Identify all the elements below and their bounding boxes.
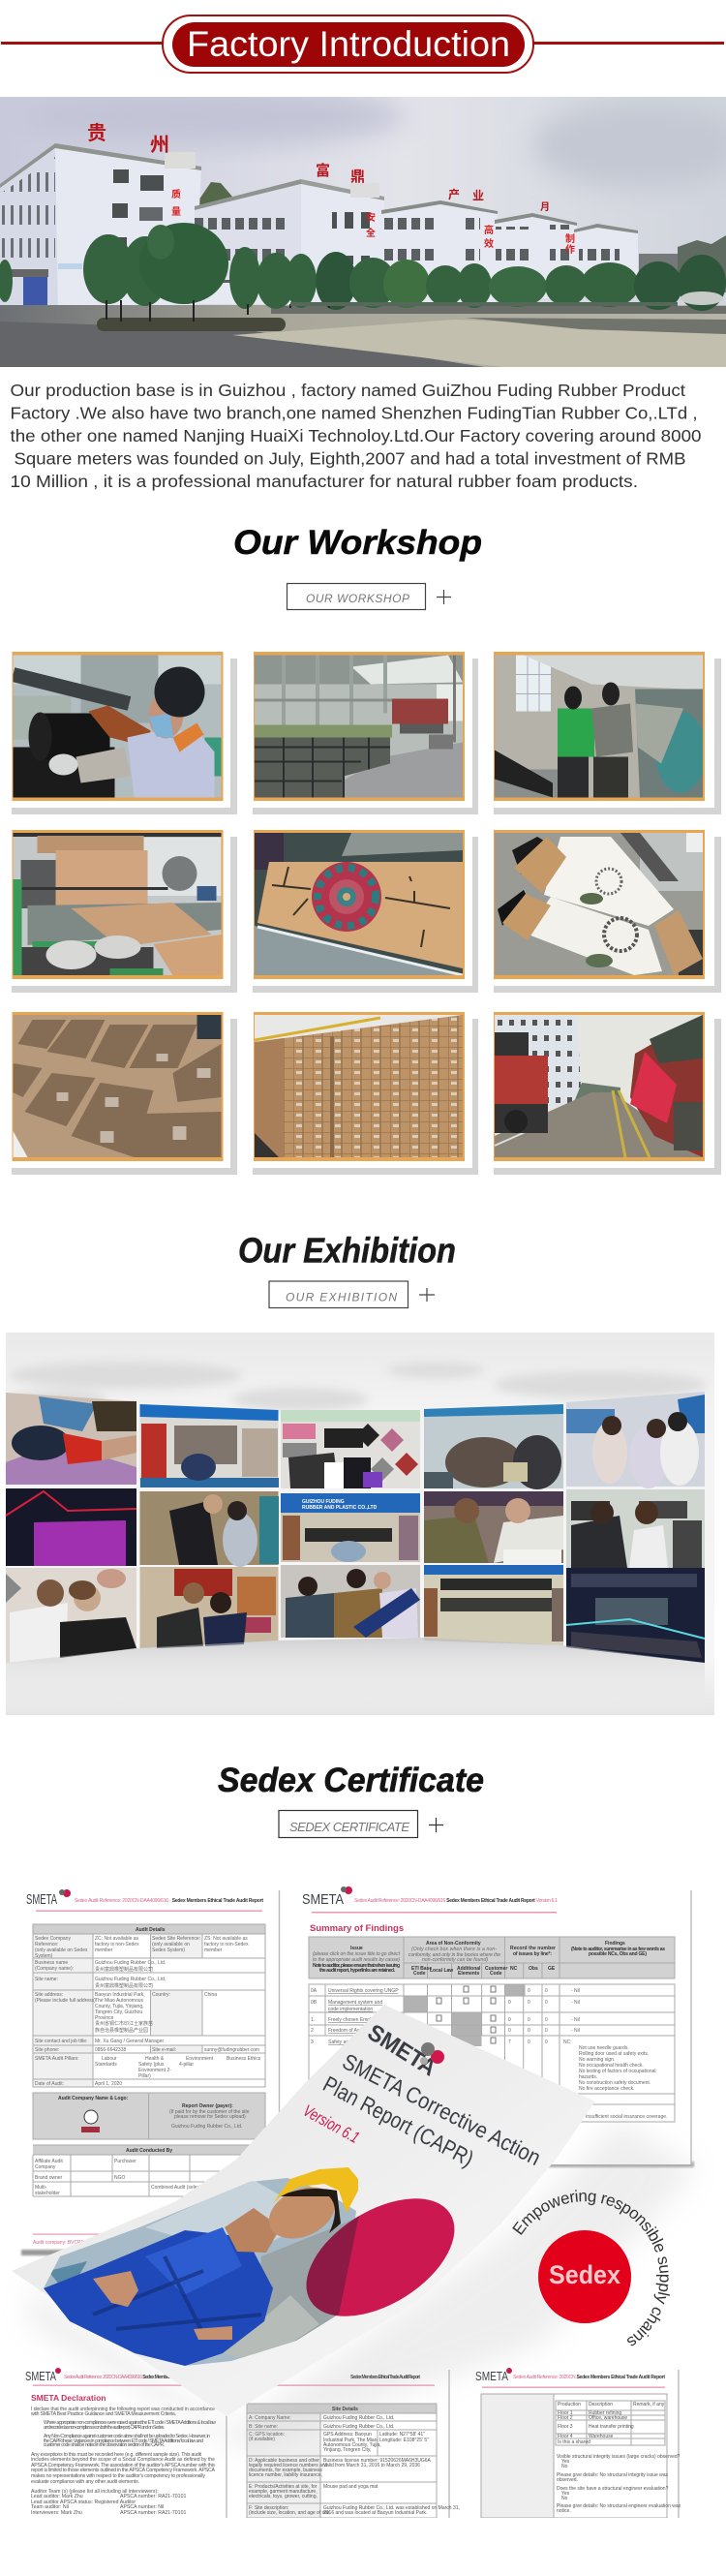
document: SMETA declaration: SMETA (25, 2369, 56, 2383)
photo: rolled printed cork mats (495, 833, 703, 975)
document: audit details: Province (95, 2015, 114, 2021)
document: audit details: ZS: Not available as (204, 1936, 248, 1942)
document: audit details: 4-pillar (179, 2062, 194, 2068)
document: site details: electricals, toys, grower, cutting, (249, 2494, 318, 2499)
document: summary of findings: Universal Rights covering UNGP (328, 1988, 399, 1994)
document: audit details: NGO (114, 2175, 126, 2181)
document: summary of findings: 0 (528, 2039, 530, 2045)
document: audit details: Audit company: BVCPS (33, 2240, 84, 2246)
document: site details: 2016 and was located at Baoyun Industrial Park. (323, 2510, 427, 2516)
document: site details: Guizhou Fuding Rubber Co., Ltd. was established on March 31, (323, 2505, 460, 2511)
worker photograph (39, 2174, 363, 2373)
document: audit details: Multi- (35, 2185, 47, 2191)
document: audit details: Report Owner (payer): (182, 2103, 233, 2109)
document: SMETA declaration: Auditor Team (s) (please list all including all interviewers): (31, 2489, 159, 2495)
photo: open cartons of product (14, 1015, 221, 1157)
tag: sedex certificate (279, 1811, 418, 1838)
sheet title: SMETA Corrective Action (339, 2048, 545, 2170)
document: summary of findings: - Nil (571, 2017, 580, 2023)
soft shadow under CAPR sheet (29, 2121, 697, 2450)
document: summary of findings: NC (510, 1966, 518, 1972)
document: audit details: ZC: Not available as (95, 1936, 139, 1942)
document: summary of findings: No warning sign. (579, 2057, 615, 2063)
booth photo row 1 (6, 1392, 705, 1489)
document: site details: A: Company Name: (249, 2415, 291, 2421)
document: audit details: Site address: (35, 1992, 63, 1998)
red rooftop signs: 产 (448, 187, 460, 201)
document: site details: Valid from March 31, 2016 to March 29, 2036 (323, 2463, 420, 2469)
document: audit details: Pillar) (138, 2073, 151, 2079)
document: audit details: member (204, 1947, 223, 1953)
document: audit details: sunny@fudingrubber.com (204, 2047, 259, 2053)
building 5 (577, 228, 638, 275)
document: audit details: Guizhou Fuding Rubber Co., Ltd. (95, 1960, 166, 1966)
document: site details: legally required licence numbers and (249, 2463, 328, 2469)
document: audit details: April 1, 2020 (95, 2081, 122, 2087)
intro paragraph: Factory .We also have two branch,one named Shenzhen FudingTian Rubber Co,.LTd , (10, 403, 697, 422)
photo: cork yoga mat with mandala (255, 833, 463, 975)
document: SMETA declaration: SMETA Declaration (31, 2393, 106, 2403)
document: summary of findings: GE (548, 1966, 556, 1972)
document: summary of findings: conformity, and only in the box/es where the (408, 1952, 500, 1958)
document: audit details: Sedex Company (35, 1936, 71, 1942)
document: site details: example, garment manufacture, (249, 2489, 318, 2495)
document: summary of findings: 2 (311, 2028, 314, 2034)
document: audit details: member (95, 1947, 113, 1953)
document: summary of findings: Freely chosen Employment (328, 2017, 387, 2023)
document: audit details: Mr. Xu Gang / General Manager (95, 2039, 164, 2044)
document: building details: Floor 2 (558, 2415, 573, 2421)
document: audit details: Environment (186, 2056, 214, 2062)
document: summary of findings: - Nil (571, 2000, 580, 2006)
document: audit details: Environment 2- (138, 2068, 171, 2073)
document: audit details: (Company name): (35, 1966, 74, 1972)
document: audit details: Sedex Audit Reference: 2020CN-DAA4096/616 - Sedex Members Ethical Trade Audit Report (75, 1898, 263, 1904)
factory photograph: 量 (171, 206, 181, 218)
heading: Our Workshop: Our Workshop (233, 524, 482, 562)
intro paragraph: 10 Million , it is a professional manufacturer for natural rubber foam products. (10, 472, 638, 491)
document: site details: Industrial Park, The Miao (323, 2438, 378, 2443)
document: summary of findings: Note to auditor, please ensure that when issuing (313, 1963, 400, 1969)
document: audit details: Business name (35, 1960, 68, 1966)
document: audit details: Site e-mail: (152, 2047, 176, 2053)
document: audit details: 贵州省铜仁市印江土家族苗 (95, 2020, 153, 2027)
document: summary of findings: 0 (545, 2017, 548, 2023)
document: audit details: Guizhou Fuding Rubber Co., Ltd. (95, 1977, 166, 1982)
document: audit details: Sedex System) (152, 1947, 185, 1953)
sheet title: Plan Report (CAPR) (319, 2070, 478, 2171)
document: audit details: Audit Details (136, 1927, 166, 1933)
worker head and helmet (260, 2167, 358, 2249)
document: SMETA declaration: report is limited to those elements outlined in the APSCA Competency Framework. APSCA (31, 2468, 216, 2473)
document: audit details: 族自治县橡塑制品产业园 (95, 2027, 148, 2034)
document: building details: Warehouse (589, 2434, 614, 2439)
document: summary of findings: 0B (311, 2000, 318, 2006)
exhibition photo wall panel (6, 1333, 714, 1715)
tag: our workshop (287, 583, 426, 610)
document: summary of findings: 0 (528, 1988, 530, 1994)
building 3 (381, 200, 498, 302)
document: summary of findings: hazards. (579, 2074, 597, 2080)
document: summary of findings: non-conformity can be found) (422, 1957, 488, 1963)
document: summary of findings: Not use needle guards. (579, 2045, 629, 2051)
document: site details: Latitude: N27°58' 41" (379, 2432, 425, 2438)
document: summary of findings: (Only check box when there is a non- (411, 1947, 497, 1952)
document: building details: Remark, if any (633, 2402, 665, 2407)
photo: cork sheet on rollers (14, 833, 221, 975)
document: SMETA declaration: Lead auditor APSCA status: Registered Auditor (31, 2499, 136, 2505)
document: audit details: Tongren City, Guizhou (95, 2009, 142, 2015)
document: summary of findings: No construction safety document. (579, 2080, 650, 2086)
document: summary of findings: Obs (529, 1966, 538, 1972)
document: audit details: Standards (95, 2062, 117, 2068)
document: summary of findings: 1. (311, 2017, 315, 2023)
document: SMETA declaration: Any exceptions to this must be recorded here (e.g. different sample size). This audit (31, 2452, 202, 2458)
document: site details: Guizhou Fuding Rubber Co., Ltd. (323, 2415, 394, 2421)
world map texture (10, 1362, 707, 1411)
building 2 (195, 179, 384, 304)
heading: Sedex Certificate: Sedex Certificate (218, 1762, 484, 1799)
document: SMETA declaration: includes elements beyond the scope of a Social Compliance Audit as defined by the (31, 2457, 215, 2463)
document: summary of findings: Freedom of Association (328, 2028, 378, 2034)
icon: plus (419, 1288, 435, 1302)
document: audit details: Health & (145, 2056, 165, 2062)
document: summary of findings: (Note to auditor, summarise in as few words as (571, 1947, 665, 1952)
intro paragraph: Our production base is in Guizhou , factory named GuiZhou Fuding Rubber Product (10, 381, 685, 400)
document: audit details: China (204, 1992, 217, 1998)
document: summary of findings: 0 (528, 2028, 530, 2034)
document: audit details: Business Ethics (227, 2056, 261, 2062)
document: site details: E: Products/Activities at site, for (249, 2484, 318, 2490)
document: audit details: stakeholder (35, 2191, 60, 2196)
document: SMETA declaration: with SMETA Best Practice Guidance and SMETA Measurement Criteria. (31, 2411, 176, 2417)
document: audit details: Purchaser (114, 2159, 136, 2164)
document: summary of findings: the audit report, hyperlinks are retained. (319, 1968, 396, 1974)
white cards and orange frames (5, 646, 714, 1168)
document: summary of findings: Findings (605, 1941, 625, 1947)
document: audit details: Site contact and job title: (35, 2039, 87, 2044)
document: summary of findings: Record the number (510, 1946, 556, 1951)
document: summary of findings: Code (413, 1971, 426, 1977)
document: audit details: Site phone: (35, 2047, 59, 2053)
document: summary of findings: 0 (508, 2028, 511, 2034)
heading text: Factory Introduction (187, 24, 510, 64)
document: SMETA declaration: Where appropriate non-compliances were raised against the ETI code / SMETA Additions & local law (44, 2420, 216, 2426)
document: building details: Yes (561, 2459, 570, 2465)
document: audit details: The Miao Autonomous (95, 1998, 144, 2004)
document: summary of findings: No testing of factors of occupational (579, 2069, 656, 2074)
document: site details (227, 2370, 460, 2518)
document: summary of findings: code implementation (328, 2007, 373, 2012)
document: site details: B: Site name: (249, 2424, 278, 2430)
photo: factory floor with racks and truck (255, 655, 463, 798)
document: summary of findings: to the appropriate audit results by cause) (313, 1957, 400, 1963)
document: audit details: SMETA (26, 1891, 57, 1908)
intro paragraph: Square meters was founded on July, Eighth,2007 and had a total investment of RMB (14, 449, 685, 469)
document: summary of findings: NC: (563, 2039, 572, 2045)
document: summary of findings (279, 1886, 694, 2167)
document: building details: Sedex Audit Reference: 2020CN Sedex Members Ethical Trade Audit Report (513, 2375, 665, 2380)
photo: stacked carton wall (255, 1015, 463, 1157)
document: SMETA declaration: APSCA number: RA21-70101 (120, 2494, 186, 2499)
document: summary of findings: Sedex Audit Reference: 2020CN-DAA4096/616 Sedex Members Ethical Trade Audit Report Version 6.1 (354, 1898, 558, 1904)
document: summary of findings: Area of Non-Conformity (426, 1941, 481, 1947)
document: building details: Does the site have a structural engineer evaluation? (557, 2486, 669, 2492)
document: building details: SMETA (475, 2369, 508, 2383)
tag: our exhibition (269, 1281, 408, 1307)
sheet version: Version 6.1 (300, 2101, 362, 2147)
document: summary of findings: SMETA (302, 1891, 344, 1908)
document: building details: observed. (557, 2477, 578, 2483)
document: SMETA declaration: Lead auditor: Mark Zhu (31, 2494, 83, 2499)
document: audit details: Date of Audit: (35, 2081, 64, 2087)
document: summary of findings: 0 (545, 2028, 548, 2034)
document: summary of findings: No fire acceptance check. (579, 2086, 635, 2092)
document: summary of findings: Issue (350, 1946, 363, 1951)
document: site details: Sedex Members Ethical Trade Audit Report (350, 2375, 420, 2380)
intro paragraph (10, 381, 702, 491)
document: building details: Please give details: No structural engineer evaluation was (557, 2503, 681, 2509)
document: summary of findings: 0 (528, 2000, 530, 2006)
document: SMETA declaration: and recorded as non-compliances on both the audit report, CAPR and on Sedex. (44, 2425, 165, 2431)
factory photograph: 全 (366, 227, 376, 239)
document: summary of findings: possible NCs, Obs and GE) (589, 1951, 647, 1957)
booth photo row 3 (6, 1565, 705, 1663)
document: site details: Autonomous County, Tujia, (323, 2442, 381, 2448)
document: audit details (21, 1889, 265, 2255)
document: audit details: County, Tujia, Yinjiang, (95, 2004, 143, 2009)
intro paragraph: the other one named Nanjing HuaiXi Technoloy.Ltd.Our Factory covering around 8000 (10, 426, 702, 445)
document: SMETA declaration: the CAPR these: Variances in compliance between ETI code / SMETA Additions/ local law and (44, 2438, 203, 2444)
document: SMETA declaration: Any Non-Compliance against customer code alone shall not be uploaded to Sedex. However, in (44, 2434, 210, 2439)
building 1 (38, 148, 201, 305)
document: site details: Longitude: E108°25' 5" (379, 2438, 429, 2443)
document: summary of findings: Customer (485, 1966, 507, 1972)
document: audit details: Country: (152, 1992, 170, 1998)
document: audit details: (If paid for by the customer of the site (169, 2109, 250, 2115)
document: audit details: please remove for Sedex upload) (174, 2114, 246, 2120)
document: audit details: System) (35, 1953, 53, 1959)
document: building details: Floor 4 (558, 2434, 573, 2439)
document: SMETA declaration (25, 2368, 223, 2516)
floor reflection (6, 1638, 705, 1715)
document: audit details: (only available on Sedex (35, 1947, 88, 1953)
document: site details: (if available) (249, 2437, 275, 2442)
document: audit details: Brand owner (35, 2175, 63, 2181)
document: building details: Floor 1 (558, 2410, 573, 2416)
document: SMETA declaration: Interviewers: Mark Zhu (31, 2510, 82, 2516)
document: site details: Site Details (332, 2407, 358, 2412)
document: building details: Office, warehouse (589, 2415, 627, 2421)
document: building details: Heat transfer printing (589, 2424, 634, 2430)
booth photo row 2: RUBBER AND PLASTIC CO.,LTD (302, 1505, 378, 1511)
red rooftop signs: 贵 (87, 122, 106, 144)
document: building details: Is this a shared (558, 2439, 590, 2445)
document: audit details: Audit Conducted By (126, 2148, 172, 2154)
document: SMETA declaration: APSCA number: Nil (120, 2504, 164, 2510)
document: summary of findings: Management system and (328, 2000, 382, 2006)
photo: worker with rubber roll (14, 655, 221, 798)
document: site details: documents, for example, business (249, 2468, 322, 2473)
document: building details: Description (589, 2402, 613, 2407)
red rooftop signs (87, 122, 550, 213)
tree rows (0, 223, 726, 311)
booth photo row 2 (6, 1488, 705, 1568)
heading: Our Exhibition: Our Exhibition (238, 1230, 456, 1271)
document: building details: Yes (561, 2491, 570, 2497)
document: site details: GPS Address: Baoyun (323, 2432, 372, 2438)
factory photograph (0, 87, 726, 367)
document: summary of findings: No occupational health check. (579, 2063, 644, 2069)
document: audit details: Company (35, 2164, 56, 2170)
document: building details: Production (558, 2402, 581, 2407)
document: summary of findings: Rolling door used at safety exits. (579, 2051, 649, 2057)
document: SMETA declaration: Team auditor: Nil (31, 2504, 69, 2510)
document: site details: Yinjiang, Tongren City, (323, 2447, 371, 2453)
document: audit details: Affiliate Audit (35, 2159, 63, 2164)
sheet logo: SMETA (363, 2019, 440, 2081)
document: audit details: Site name: (35, 1977, 58, 1982)
tag: our workshop: OUR WORKSHOP (306, 592, 409, 605)
document: building details (475, 2368, 681, 2518)
document: audit details: Guizhou Fuding Rubber Co., Ltd. (171, 2124, 242, 2130)
document: audit details: Safety (plus (138, 2062, 165, 2068)
document: building details: No (561, 2496, 568, 2501)
document: SMETA declaration: APSCA number: RA21-70101 (120, 2510, 186, 2516)
building 4 (495, 213, 577, 298)
document: audit details: SMETA Audit Pillars: (35, 2056, 78, 2062)
factory photograph: 高 (484, 224, 494, 236)
document: site details: Business license number: 91520626MA6H3UG6A (323, 2458, 432, 2464)
document: summary of findings: 0 (545, 1988, 548, 1994)
document: audit details: factory is non-Sedex (204, 1942, 249, 1947)
card shadows (12, 659, 721, 1175)
document: audit details: Baoyun Industrial Park, (95, 1992, 145, 1998)
document: summary of findings: 0 (545, 2039, 548, 2045)
red rooftop signs: 业 (472, 189, 484, 202)
document: site details: (include size, location, and age of site. (249, 2510, 331, 2516)
section header: Factory Introduction (1, 15, 724, 73)
document: audit details: Labour (102, 2056, 117, 2062)
document: summary of findings: (please click on the issue title to go direct (313, 1951, 401, 1957)
document: summary of findings: of issues by line*: (513, 1951, 552, 1957)
document: SMETA declaration: evaluate compliance with any other audit elements. (31, 2479, 139, 2485)
document: summary of findings: Local Law (430, 1968, 453, 1974)
red rooftop signs: 州 (150, 135, 169, 156)
document: SMETA declaration: makes no representations with respect to the auditor's competency to professionally (31, 2473, 205, 2479)
document: audit details: 贵州富鼎橡塑制品有限公司 (95, 1982, 153, 1989)
tag: our exhibition: OUR EXHIBITION (286, 1290, 397, 1303)
document: summary of findings: Summary of Findings (310, 1923, 404, 1934)
ground (0, 305, 726, 367)
document: summary of findings: Safety and Hygiene (328, 2039, 371, 2045)
document: summary of findings: - Nil (571, 2028, 580, 2034)
document: site details: licence number, liability insurance, (249, 2472, 322, 2478)
document: summary of findings: Code (490, 1971, 502, 1977)
document: summary of findings: - Nil (571, 1988, 580, 1994)
document: summary of findings: Elements (458, 1971, 479, 1977)
document: building details: Please give details: No structural integrity issue was (557, 2472, 669, 2478)
photo: workers at machine (495, 655, 703, 798)
document: site details: Guizhou Fuding Rubber Co., Ltd. (323, 2424, 394, 2430)
document: summary of findings: 0 (545, 2000, 548, 2006)
document: audit details: (Please include full address) (35, 1998, 96, 2004)
factory photograph: 作 (565, 243, 575, 256)
Sedex red circle logo (538, 2230, 631, 2323)
document: summary of findings: 0A (311, 1988, 318, 1994)
factory photograph: 安 (366, 211, 376, 224)
booth photo row 2: GUIZHOU FUDING (302, 1499, 345, 1505)
document: summary of findings: 0 (508, 2017, 511, 2023)
document: audit details: 贵州富鼎橡塑制品有限公司 (95, 1966, 153, 1973)
workshop photo grid (5, 646, 721, 1175)
certificate collage (12, 1886, 696, 2518)
document: building details: Floor 3 (558, 2424, 573, 2430)
pink circle overlay (286, 2174, 475, 2341)
document: summary of findings: 3 (311, 2039, 314, 2045)
red rooftop signs: 富 (316, 162, 330, 179)
curved slogan: Empowering responsible supply chains (512, 2190, 670, 2346)
factory photograph: 制 (565, 232, 575, 245)
document: audit details: Sedex Site Reference: (152, 1936, 200, 1942)
Sedex red circle logo: Sedex (549, 2260, 620, 2289)
document: site details: F: Site description: (249, 2505, 288, 2511)
red rooftop signs: 月 (540, 201, 550, 213)
document: SMETA declaration: Sedex Audit Reference: 2020CN-DAA4096/616 Sedex Members Ethical Trade Audit Report (64, 2375, 219, 2380)
document: building details: No (561, 2464, 568, 2469)
document: summary of findings: 7 (508, 2039, 511, 2045)
document: summary of findings: 0 (528, 2017, 530, 2023)
document: SMETA declaration: I declare that the audit underpinning the following report was conducted in accordance (31, 2407, 215, 2412)
document: SMETA declaration: customer code shall be noted in the observation section of the CAPR. (44, 2442, 165, 2448)
document: site details: C: GPS location: (249, 2432, 285, 2438)
document: building details: notice. (557, 2508, 571, 2514)
document: site details: D: Applicable business and other (249, 2458, 319, 2464)
CAPR report sheet (12, 2005, 595, 2416)
factory photograph: 效 (484, 237, 494, 250)
photo: loaded trucks and red flag (495, 1015, 703, 1157)
factory photograph: 质 (171, 188, 181, 200)
document: audit details: factory is non-Sedex (95, 1942, 139, 1947)
document: summary of findings: Additional (457, 1966, 481, 1972)
document: audit details: (only available on (152, 1942, 190, 1947)
document: SMETA declaration: APSCA Competency Framework. The association of the auditor's APSCA number with this (31, 2463, 215, 2469)
document: site details: Mouse pad and yoga mat (323, 2484, 378, 2490)
document: summary of findings: 0 (508, 2000, 511, 2006)
document: audit details: Reference: (35, 1942, 58, 1947)
icon: plus (429, 1818, 443, 1832)
document: summary of findings: ETI Base (411, 1966, 432, 1972)
document: building details: Rubber refining (589, 2410, 621, 2416)
icon: plus (437, 590, 451, 604)
document: building details: Visible structural integrity issues (large cracks) observed? (557, 2454, 681, 2460)
document: summary of findings: Insufficient social insurance coverage. (586, 2114, 667, 2120)
red rooftop signs: 鼎 (350, 169, 365, 185)
document: audit details: 0856-6642338 (95, 2047, 126, 2053)
document: audit details: Audit Company Name & Logo: (58, 2096, 129, 2101)
document: audit details: Combined Audit (select all that apply) (151, 2185, 231, 2191)
tag: sedex certificate: SEDEX CERTIFICATE (289, 1820, 409, 1834)
